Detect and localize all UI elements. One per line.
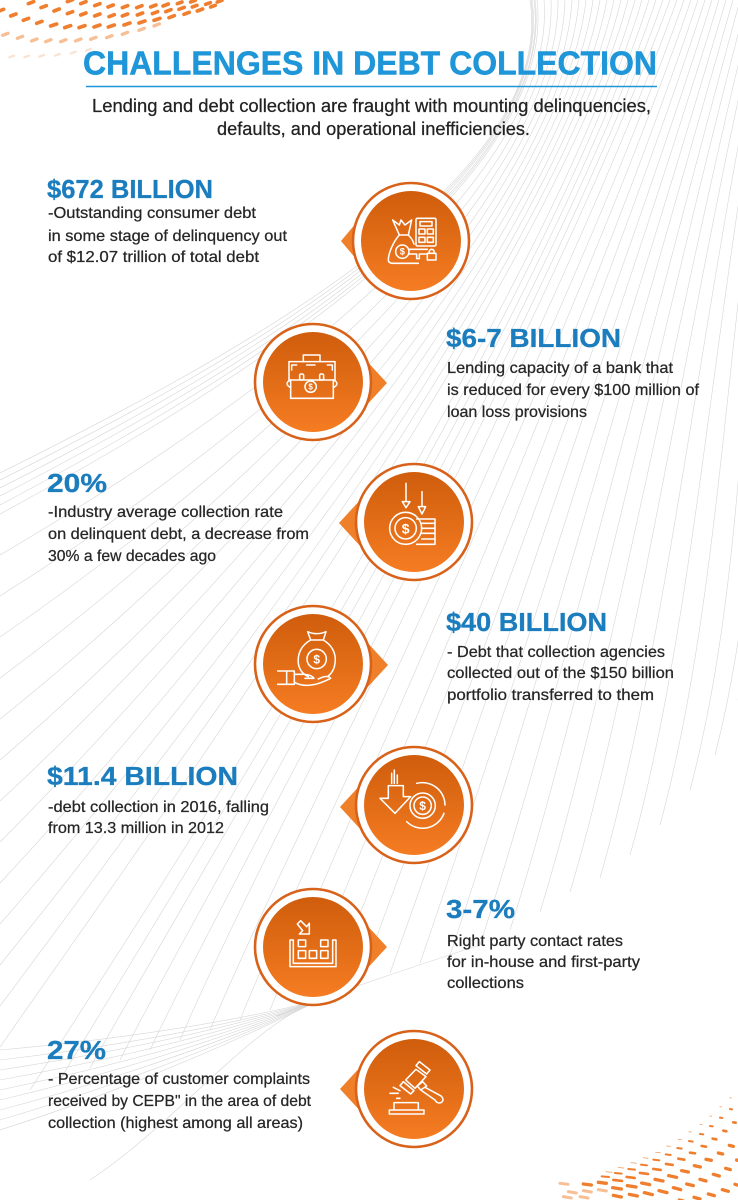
text block: $672 billion: in some stage of delinquency out [48, 228, 288, 245]
text block: $6-7 billion: Lending capacity of a bank that [447, 360, 674, 377]
text block: 20%: 20% [47, 468, 107, 498]
text block: $40 billion [446, 607, 674, 704]
text block: 3-7% [446, 894, 640, 992]
text block: $40 billion: $40 BILLION [446, 607, 607, 637]
text block: $11.4 billion: from 13.3 million in 2012 [48, 820, 224, 837]
badge 2: briefcase icon [255, 324, 387, 440]
text block: $40 billion: - Debt that collection agencies [447, 644, 665, 661]
subtitle: Lending and debt collection are fraught with mounting delinquencies, [92, 96, 651, 116]
badge 3: coins and down arrows icon [339, 464, 472, 580]
text block: $6-7 billion: $6-7 BILLION [446, 323, 621, 353]
text block: 20% [47, 468, 309, 565]
text block: $672 billion: of $12.07 trillion of total debt [48, 249, 260, 266]
halftone dots: top left [0, 0, 222, 57]
badge 6: tray with blocks icon [255, 889, 387, 1005]
badge 5: falling arrow and coin icon: $ [419, 799, 426, 813]
badge 1: money bag and calculator icon [341, 183, 469, 299]
title: CHALLENGES IN DEBT COLLECTION [83, 46, 657, 82]
badge 3: coins and down arrows icon: $ [402, 520, 410, 536]
text block: $6-7 billion: loan loss provisions [447, 404, 587, 421]
text block: 27%: - Percentage of customer complaints [48, 1071, 310, 1088]
text block: $11.4 billion: $11.4 BILLION [47, 761, 238, 791]
text block: $6-7 billion: is reduced for every $100 million of [447, 382, 700, 399]
text block: $6-7 billion [446, 323, 700, 421]
text block: $11.4 billion: -debt collection in 2016, falling [48, 799, 269, 816]
text block: $40 billion: collected out of the $150 billion [447, 665, 674, 682]
text block: $672 billion: $672 BILLION [47, 174, 213, 204]
subtitle: defaults, and operational inefficiencies. [217, 119, 530, 139]
badge 2: briefcase icon: $ [308, 383, 313, 392]
text block: 3-7%: collections [447, 975, 524, 992]
badge 7: gavel icon [340, 1031, 472, 1147]
text block: 20%: -Industry average collection rate [48, 504, 283, 521]
halftone dots: bottom right [560, 1098, 738, 1200]
text block: 3-7%: for in-house and first-party [447, 954, 640, 971]
text block: 3-7%: Right party contact rates [447, 933, 623, 950]
badge 4: hand holding money bag icon [255, 606, 388, 722]
text block: 20%: on delinquent debt, a decrease from [48, 526, 309, 543]
badge 5: falling arrow and coin icon [340, 747, 472, 863]
text block: $40 billion: portfolio transferred to them [447, 687, 654, 704]
badge 1: money bag and calculator icon: $ [400, 247, 406, 257]
text block: $672 billion: -Outstanding consumer debt [48, 205, 257, 222]
text block: $672 billion [47, 174, 288, 266]
text block: 27% [47, 1035, 312, 1132]
text block: 27%: received by CEPB" in the area of debt [48, 1093, 312, 1110]
badge 4: hand holding money bag icon: $ [313, 652, 320, 666]
subtitle [92, 96, 651, 139]
text block: 27%: collection (highest among all areas) [48, 1115, 303, 1132]
text block: $11.4 billion [47, 761, 269, 837]
text block: 20%: 30% a few decades ago [48, 548, 216, 565]
text block: 3-7%: 3-7% [446, 894, 515, 924]
text block: 27%: 27% [47, 1035, 106, 1065]
